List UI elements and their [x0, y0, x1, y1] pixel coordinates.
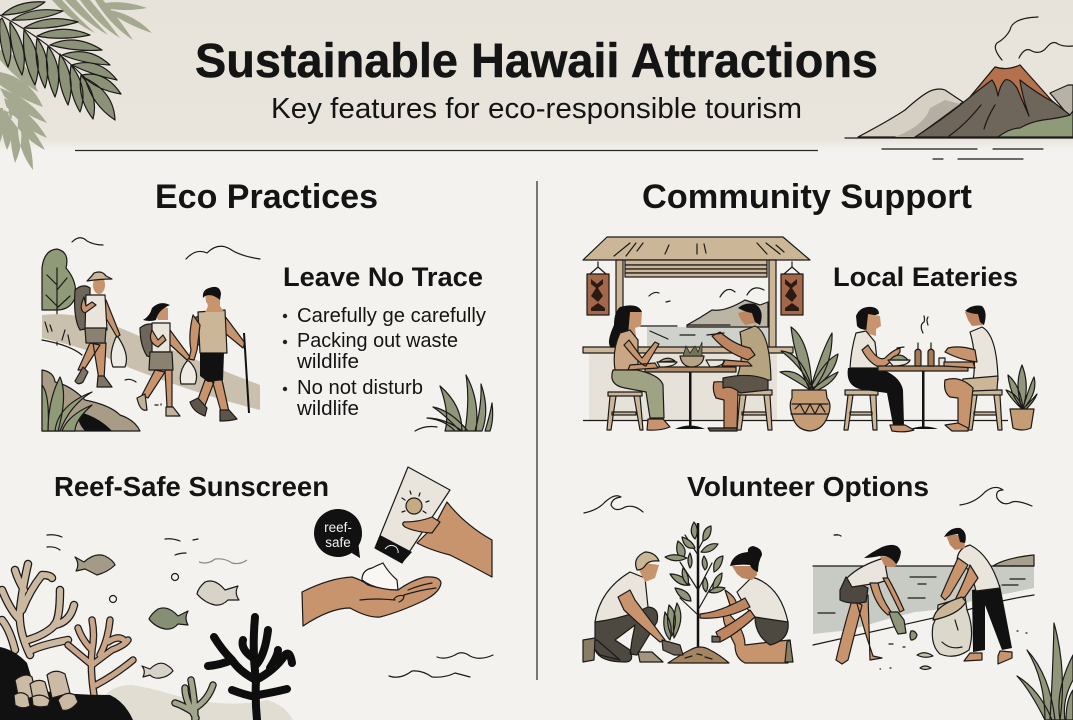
coral 1 [2, 564, 74, 655]
seated man 2 [944, 306, 998, 431]
icon: corner plant [1017, 623, 1073, 720]
bullet list: No not disturb [297, 376, 423, 399]
heading: eco practices: Eco Practices [155, 178, 378, 216]
small potted plant [1006, 365, 1037, 430]
icon: volcano landscape [845, 17, 1073, 159]
black coral [208, 617, 292, 720]
coral 2 [68, 620, 133, 695]
fish [47, 535, 247, 678]
panel: community support [583, 178, 1073, 720]
bullet list: wildlife [296, 350, 359, 373]
heading: volunteer options: Volunteer Options [687, 471, 929, 502]
illustration: beach cleanup [813, 528, 1034, 670]
stools [607, 390, 1002, 430]
potted plant [780, 327, 838, 431]
sign right [781, 262, 803, 315]
illustration: reef [0, 535, 293, 720]
title: Sustainable Hawaii Attractions [195, 35, 878, 88]
badge text: reef- [324, 520, 352, 535]
heading: leave no trace: Leave No Trace [283, 262, 483, 292]
woman diner [609, 305, 670, 430]
heading: reef-safe sunscreen: Reef-Safe Sunscreen [54, 471, 329, 502]
illustration: eatery 1 [583, 237, 1037, 432]
kneeling man [595, 607, 658, 662]
barrel sponges [14, 671, 78, 710]
illustration: sunscreen: safe [325, 535, 351, 550]
sign left [587, 262, 609, 315]
rock [0, 647, 133, 720]
illustration: planting [583, 487, 1032, 663]
header band [0, 0, 1073, 150]
algae [175, 680, 213, 720]
icon: palm fronds [0, 0, 152, 170]
hiker 3 [194, 312, 208, 345]
icon: shrub [415, 375, 493, 431]
subtitle: Key features for eco-responsible tourism [271, 93, 802, 125]
table 1 [645, 342, 736, 429]
heading: community support: Community Support [642, 178, 972, 216]
hiker 1 [75, 286, 90, 330]
bullet list: wildlife [296, 397, 359, 420]
bullet list [283, 304, 487, 420]
sapling [697, 523, 699, 647]
heading: local eateries: Local Eateries [833, 262, 1018, 292]
seated woman 2 [848, 307, 914, 432]
litter [910, 631, 917, 640]
centre divider [536, 181, 538, 680]
header rule [75, 150, 818, 152]
hiker 2 [140, 324, 155, 358]
illustration: sunscreen [302, 467, 493, 677]
man bending [972, 585, 1012, 652]
kneeling woman [723, 590, 791, 663]
illustration: hikers [42, 238, 260, 431]
table 2 [878, 316, 968, 429]
bullet list: Carefully ge carefully [297, 304, 487, 327]
man diner [707, 304, 771, 431]
panel: eco practices [0, 178, 493, 720]
woman bending [836, 595, 882, 664]
speech bubble [338, 509, 362, 558]
bullet list: Packing out waste [297, 329, 458, 352]
garbage bag [932, 597, 972, 656]
